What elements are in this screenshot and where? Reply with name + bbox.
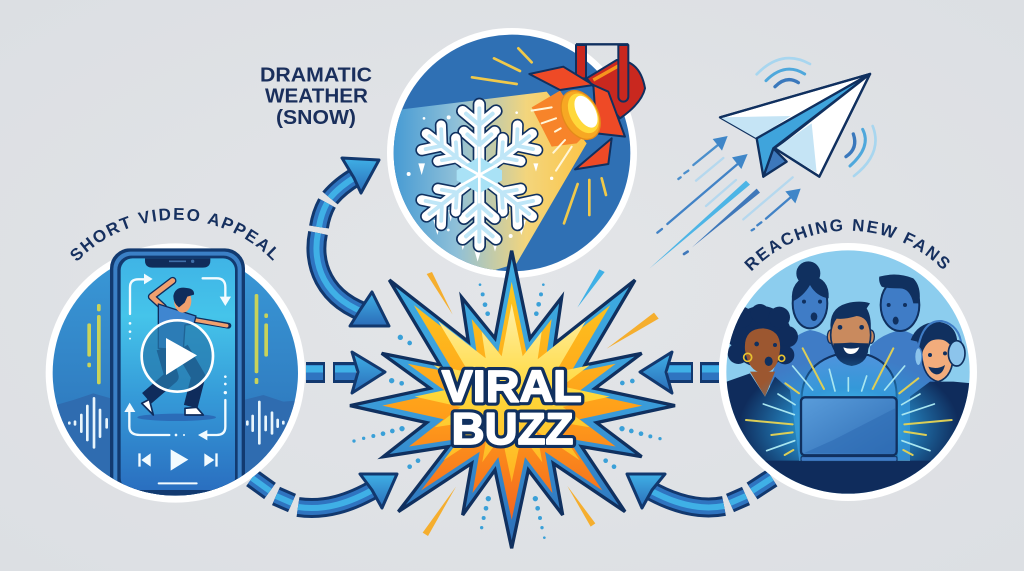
headline: viral buzz: BUZZ <box>452 405 573 454</box>
centre man <box>802 355 897 460</box>
panel: reaching new fans circle <box>719 243 980 504</box>
back woman <box>770 262 837 460</box>
headline: viral buzz: BUZZ <box>452 405 573 454</box>
icon: spotlight <box>529 44 645 169</box>
arrow: new fans to burst <box>640 352 719 393</box>
spotlight rays <box>472 48 606 223</box>
media controls <box>138 449 218 484</box>
headline: viral buzz: VIRAL <box>442 363 582 412</box>
light rays <box>746 348 952 455</box>
panel: short video appeal <box>46 243 305 503</box>
speed arrows <box>649 143 793 269</box>
arrow: curved segmented arrow toward snow circle and burst <box>316 158 389 326</box>
icon: paper plane with speed lines <box>649 58 876 269</box>
label: reaching new fans: REACHING NEW FANS <box>744 219 950 271</box>
star outer layer <box>350 251 675 548</box>
circle background <box>387 28 637 278</box>
label: dramatic weather snow <box>260 64 372 129</box>
label: dramatic weather snow: DRAMATIC <box>260 64 372 86</box>
play button <box>142 320 213 392</box>
decorative streaks and dots <box>423 269 659 536</box>
label: short video appeal: SHORT VIDEO APPEAL <box>70 208 276 261</box>
snow sparkles and icicles <box>407 111 553 262</box>
star middle layer <box>382 282 642 520</box>
sound waves <box>69 398 283 447</box>
circle background <box>719 243 977 501</box>
radio waves <box>757 58 876 176</box>
burst: viral buzz starburst <box>350 251 675 548</box>
label: dramatic weather snow: WEATHER <box>265 86 369 108</box>
laptop glow <box>744 360 954 461</box>
headline: viral buzz: VIRAL <box>442 363 582 412</box>
phone <box>110 248 245 502</box>
headline: viral buzz <box>442 363 582 454</box>
back man <box>870 275 940 460</box>
plane folds <box>720 74 870 177</box>
motion arrows <box>129 278 225 435</box>
arrow: lower left curved arrow <box>252 474 397 508</box>
dancer <box>137 281 228 421</box>
star inner layer <box>415 304 610 482</box>
arrow: short video to burst <box>306 352 385 393</box>
notch <box>145 258 210 268</box>
light beam <box>387 92 587 277</box>
icon: laptop <box>801 397 897 455</box>
circle background <box>46 243 305 503</box>
desk <box>764 460 932 494</box>
icon: snowflake <box>417 104 542 246</box>
panel: dramatic weather snow circle <box>387 28 645 278</box>
man with headphones <box>910 382 972 467</box>
arrow: lower right curved arrow <box>627 474 772 508</box>
yellow level bars <box>87 294 268 384</box>
woman with afro <box>727 373 800 467</box>
label: dramatic weather snow: (SNOW) <box>276 107 356 129</box>
